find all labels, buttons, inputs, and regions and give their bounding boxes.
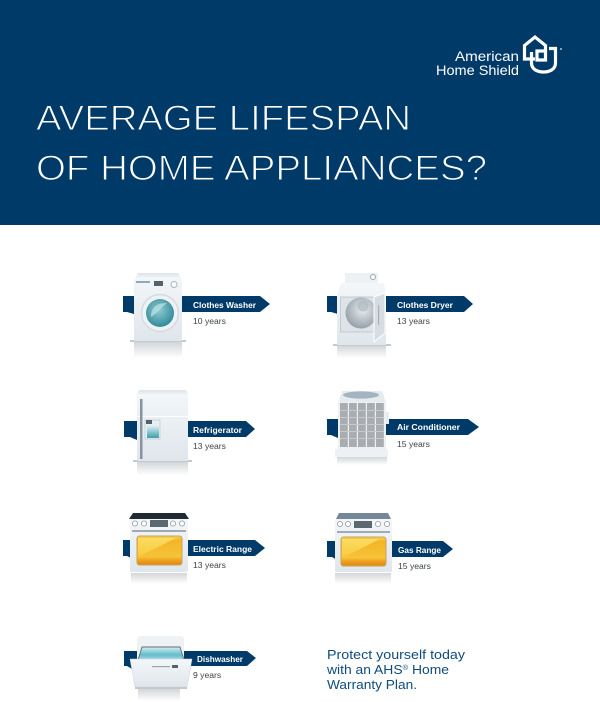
illustration: air conditioner: [335, 391, 389, 465]
ribbon: clothes dryer: [327, 296, 473, 314]
appliance: refrigerator: [124, 390, 255, 475]
call to action: Warranty Plan.: [327, 677, 417, 692]
label: refrigerator: Refrigerator: [193, 425, 243, 435]
lifespan: 15 years: 15 years: [398, 561, 431, 571]
ribbon: clothes washer: [123, 296, 270, 314]
lifespan: 10 years: 10 years: [193, 316, 226, 326]
ribbon: refrigerator: [124, 421, 255, 440]
appliance: air conditioner: [327, 391, 479, 465]
ribbon: air conditioner: [327, 419, 479, 438]
illustration: dryer: [333, 273, 391, 358]
title: [36, 98, 487, 188]
appliance: electric range: [123, 513, 265, 584]
ribbon: gas range: [327, 541, 453, 560]
appliance: gas range: [327, 513, 453, 584]
label: electric range: Electric Range: [193, 544, 252, 554]
logo: American Home Shield: American: [455, 49, 519, 64]
title: OF HOME APPLIANCES?: [36, 148, 487, 188]
call to action: Home: [408, 662, 449, 677]
logo: American Home Shield: [436, 37, 562, 78]
lifespan: 13 years: 13 years: [193, 441, 226, 451]
ribbon: dishwasher: [124, 651, 256, 669]
header banner: [0, 0, 600, 225]
label: clothes washer: Clothes Washer: [193, 300, 257, 310]
illustration: gas range: [335, 513, 392, 584]
label: air conditioner: Air Conditioner: [397, 422, 461, 432]
illustration: electric range: [129, 513, 189, 584]
logo: American Home Shield: Home Shield: [436, 63, 519, 78]
ribbon: electric range: [123, 540, 265, 559]
lifespan: 15 years: 15 years: [397, 439, 430, 449]
call to action: Protect yourself today: [327, 647, 466, 662]
title: AVERAGE LIFESPAN: [36, 98, 411, 138]
appliance: clothes washer: [123, 273, 270, 358]
lifespan: 13 years: 13 years: [193, 560, 226, 570]
illustration: washer: [130, 273, 186, 358]
label: dishwasher: Dishwasher: [197, 654, 244, 664]
lifespan: 13 years: 13 years: [397, 316, 430, 326]
call to action: [326, 647, 466, 692]
label: gas range: Gas Range: [398, 545, 441, 555]
call to action: ®: [403, 664, 409, 672]
lifespan: 9 years: 9 years: [193, 670, 221, 680]
appliance: clothes dryer: [327, 273, 473, 358]
illustration: refrigerator: [133, 390, 192, 475]
call to action: with an AHS: [327, 662, 398, 677]
appliance: dishwasher: [124, 636, 256, 701]
illustration: dishwasher: [130, 636, 192, 701]
label: clothes dryer: Clothes Dryer: [397, 300, 454, 310]
